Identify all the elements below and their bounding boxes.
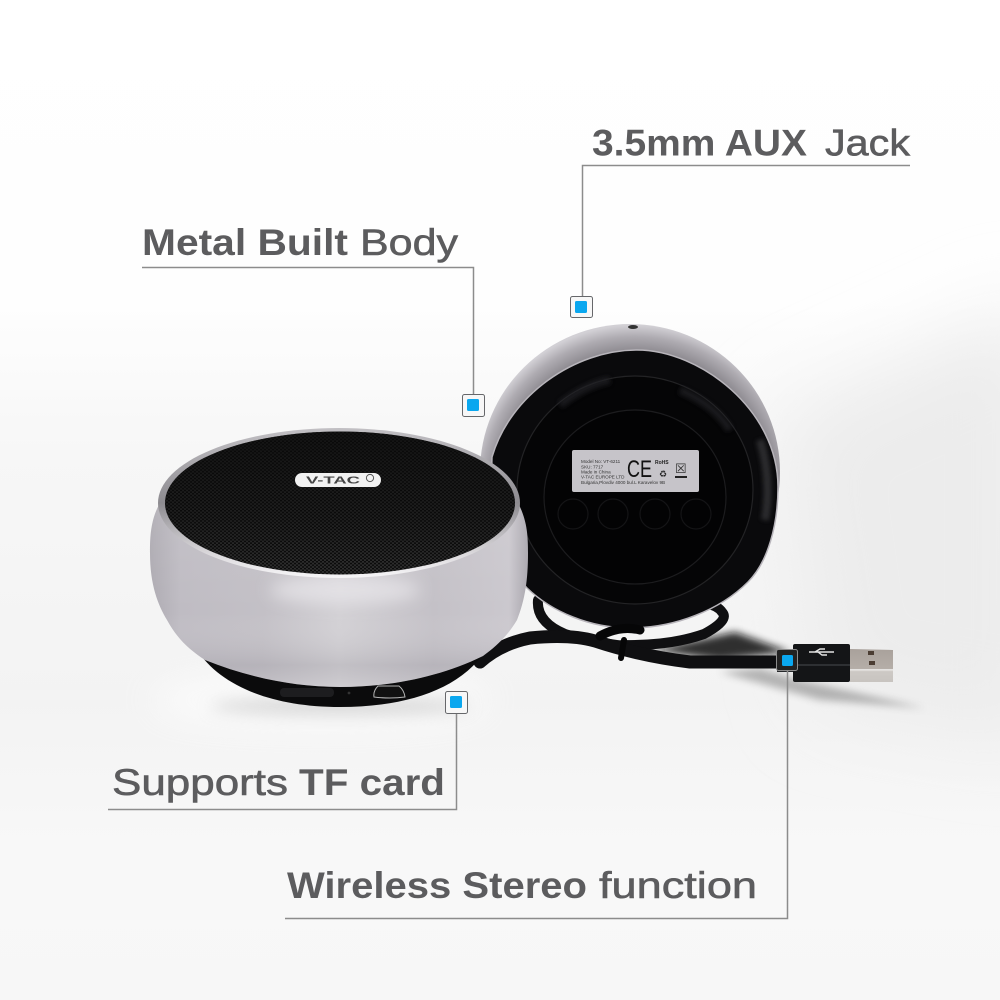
- heading: Wireless Stereo function: [287, 865, 757, 906]
- heading: Supports TF card: Supports: [112, 762, 288, 803]
- speaker front: logo badge: V-TAC: [306, 474, 361, 486]
- heading: 3.5mm AUX Jack: [592, 122, 911, 164]
- speaker back: black base: [492, 350, 778, 628]
- speaker back: product label: Bulgaria,Plovdiv 4000 bul.L Karavelov 9B: [581, 480, 665, 485]
- heading: Wireless Stereo function: function: [599, 865, 757, 906]
- heading: Wireless Stereo function: Wireless Stereo: [287, 865, 587, 906]
- speaker back: silver shell: [480, 324, 780, 620]
- speaker front: body highlight: [270, 576, 420, 604]
- speaker front: micro USB port: [374, 686, 405, 698]
- heading: Metal Built Body: [142, 222, 459, 263]
- USB metal tip: [850, 649, 893, 682]
- speaker back: glossy ring: [517, 376, 753, 604]
- USB plug body: [793, 644, 850, 682]
- cable knot and tie: [600, 628, 640, 658]
- heading: Supports TF card: [112, 762, 445, 803]
- speaker front: silver body: [150, 503, 528, 687]
- speaker back: product label: Model No: VT-6211: [581, 459, 621, 464]
- leader line: [582, 166, 910, 297]
- callout: Supports TF card: [108, 692, 468, 810]
- speaker back: product label: RoHS: [655, 460, 669, 466]
- product shadows: [150, 632, 925, 724]
- USB ferrule: [777, 650, 797, 672]
- speaker front: rim: [158, 428, 520, 578]
- speaker back: gloss highlights: [560, 380, 768, 520]
- USB connector: [777, 644, 893, 682]
- speaker back: product label: Made in China: [581, 470, 611, 474]
- callout: 3.5mm AUX Jack: [570, 122, 911, 318]
- marker: [570, 296, 592, 318]
- speaker back: product label: ☒: [675, 461, 687, 476]
- heading: Metal Built Body: Body: [360, 222, 459, 263]
- marker: [462, 394, 484, 416]
- heading: 3.5mm AUX Jack: 3.5mm AUX: [592, 122, 807, 164]
- leader line: [108, 713, 456, 810]
- speaker back: product label: V-TAC EUROPE LTD: [581, 474, 625, 480]
- speaker back: inner disc: [544, 410, 726, 584]
- marker: [446, 692, 468, 714]
- speaker front: black base: [197, 650, 486, 707]
- speaker back: product label: SKU: 7717: [581, 464, 604, 470]
- speaker front: mesh grille: [165, 432, 515, 574]
- speaker back: port dot: [628, 325, 638, 329]
- speaker back: product label: CE: [627, 456, 652, 483]
- callout: Metal Built Body: [142, 222, 484, 416]
- callout: Wireless Stereo function: [285, 650, 798, 918]
- speaker back: buttons: [558, 499, 711, 529]
- speaker back: product label: [572, 450, 699, 492]
- speaker front: TF card slot: [280, 688, 334, 697]
- speaker back: product label: ♻: [659, 469, 667, 479]
- speaker front: indicator hole: [348, 692, 350, 694]
- leader line: [142, 268, 474, 394]
- heading: Supports TF card: TF card: [299, 762, 445, 803]
- speaker front: logo badge: [295, 473, 381, 487]
- USB cable: [480, 600, 780, 662]
- USB symbol: [809, 649, 834, 655]
- leader line: [285, 671, 788, 918]
- heading: Metal Built Body: Metal Built: [142, 222, 348, 263]
- marker: [776, 650, 798, 670]
- heading: 3.5mm AUX Jack: Jack: [825, 122, 911, 164]
- speaker back view: [480, 324, 780, 628]
- speaker front view: [150, 428, 528, 707]
